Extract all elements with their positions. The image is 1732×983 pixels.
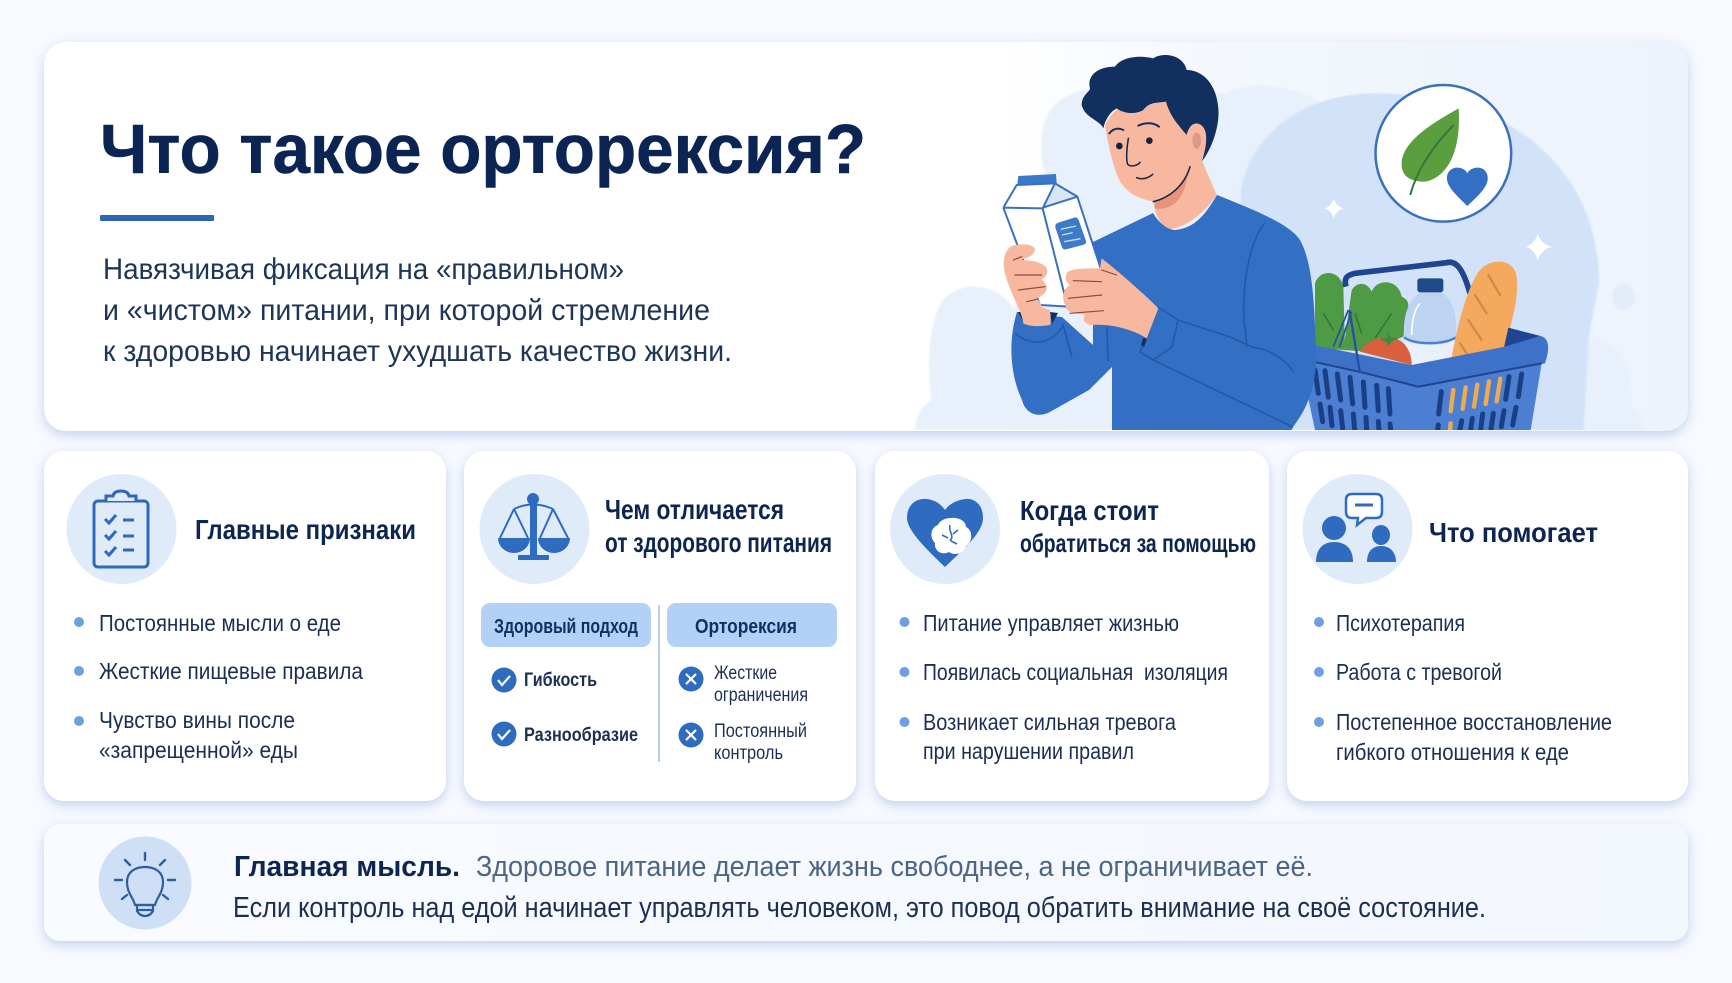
description: к здоровью начинает ухудшать качество жизни. <box>103 335 732 368</box>
heading <box>1020 495 1256 558</box>
list: Работа с тревогой <box>1336 659 1502 685</box>
key message text: Если контроль над едой начинает управлять человеком, это повод обратить внимание на своё состояние. <box>233 892 1486 924</box>
column: orthorexia: Орторексия <box>695 616 797 638</box>
column: orthorexia: ограничения <box>714 685 808 706</box>
list: гибкого отношения к еде <box>1336 739 1569 765</box>
heading: Чем отличается <box>605 494 784 525</box>
list: Питание управляет жизнью <box>923 610 1179 636</box>
key message text <box>233 851 1486 924</box>
list: Чувство вины после <box>99 707 295 733</box>
list: Постепенное восстановление <box>1336 709 1612 735</box>
list <box>1314 610 1612 765</box>
list: Возникает сильная тревога <box>923 709 1176 735</box>
column: orthorexia <box>667 603 837 764</box>
panel: когда обратиться <box>875 451 1269 801</box>
icon: two people talking <box>1302 474 1412 584</box>
list: Появилась социальная изоляция <box>923 659 1228 685</box>
heading: Когда стоит <box>1020 495 1159 526</box>
list: Психотерапия <box>1336 610 1465 636</box>
man: head <box>1082 55 1219 229</box>
column: healthy approach: Здоровый подход <box>494 616 638 638</box>
column: orthorexia: Жесткие <box>714 663 777 684</box>
column: orthorexia: контроль <box>714 743 783 764</box>
heading: от здорового питания <box>605 527 832 558</box>
heading <box>605 494 832 558</box>
heading: обратиться за помощью <box>1020 528 1256 558</box>
panel: главная мысль <box>44 824 1688 941</box>
list: Постоянные мысли о еде <box>99 610 341 636</box>
hands <box>1004 244 1158 338</box>
icon: clipboard <box>66 474 176 584</box>
key message text: Здоровое питание делает жизнь свободнее, а не ограничивает её. <box>476 851 1313 883</box>
description <box>103 253 732 368</box>
list: при нарушении правил <box>923 738 1134 764</box>
key message text: Главная мысль. <box>234 851 460 883</box>
panel: hero <box>44 42 1688 431</box>
heading: Главные признаки <box>195 514 416 545</box>
background clouds <box>915 86 1645 430</box>
illustration: man with carton and basket <box>915 55 1645 431</box>
basket <box>1309 262 1548 430</box>
milk carton <box>1003 174 1101 307</box>
divider <box>658 605 660 762</box>
title underline <box>100 215 214 221</box>
title: Что такое орторексия? <box>100 110 866 188</box>
sparkles <box>1324 198 1552 261</box>
column: healthy approach: Разнообразие <box>524 725 638 746</box>
icon: lightbulb <box>98 836 192 930</box>
list: «запрещенной» еды <box>99 737 298 763</box>
column: healthy approach <box>481 603 651 746</box>
panel: чем отличается <box>464 451 856 801</box>
list <box>74 610 363 763</box>
description: и «чистом» питании, при которой стремление <box>103 294 710 327</box>
column: healthy approach: Гибкость <box>524 670 597 691</box>
icon: leaf and heart badge <box>1376 85 1511 222</box>
icon: heart with brain <box>890 474 1000 584</box>
list: Жесткие пищевые правила <box>99 658 363 684</box>
heading: Что помогает <box>1429 517 1598 548</box>
description: Навязчивая фиксация на «правильном» <box>103 253 624 286</box>
column: orthorexia: Постоянный <box>714 721 807 742</box>
icon: scales <box>480 474 590 584</box>
panel: что помогает <box>1287 451 1688 801</box>
man: sweater <box>1011 195 1316 431</box>
panel: главные признаки <box>44 451 446 801</box>
list <box>900 610 1228 764</box>
